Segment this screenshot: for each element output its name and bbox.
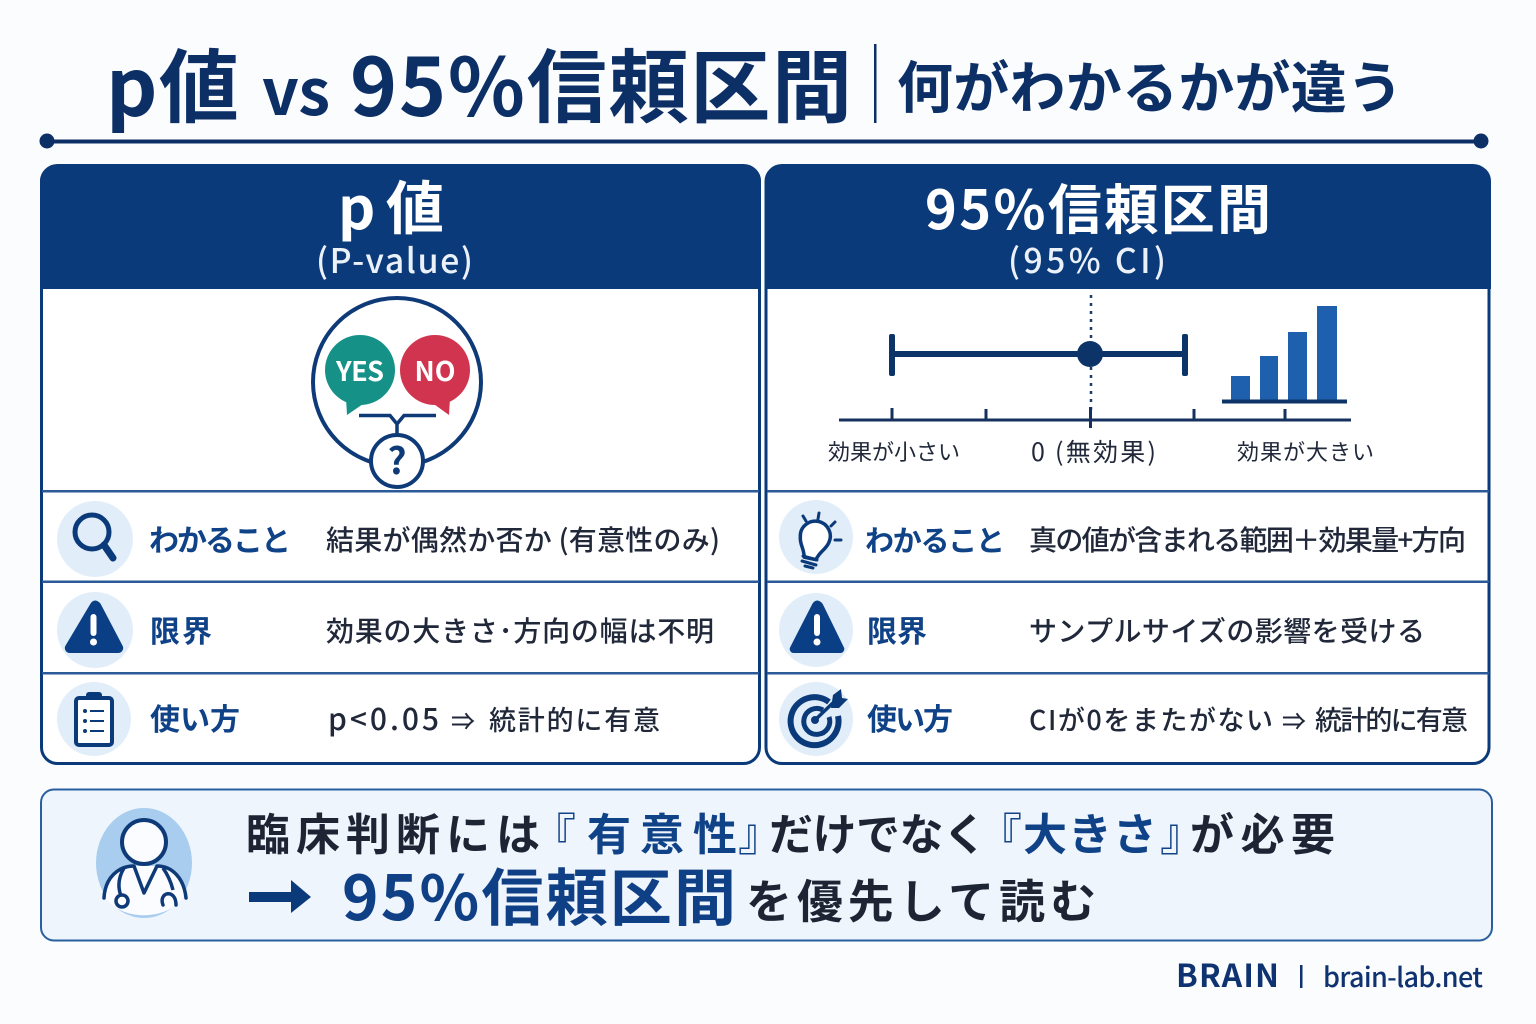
conclusion line 1: 』 xyxy=(1160,799,1204,863)
usage text: ⇒ xyxy=(451,702,475,737)
conclusion line 1: だけでなく xyxy=(769,799,987,863)
row: what it tells: 結果が偶然か否か (有意性のみ) xyxy=(326,519,720,559)
panel header: confidence interval: 95%信頼区間 xyxy=(925,166,1271,245)
panel header: confidence interval: (95% CI) xyxy=(1008,234,1166,283)
panel: conclusion xyxy=(41,790,1492,997)
panel: confidence interval xyxy=(765,165,1491,764)
row: limits: 限界 xyxy=(867,607,927,651)
usage text: 統計的に有意 xyxy=(1315,699,1468,738)
conclusion line 1: 『 xyxy=(978,799,1022,863)
row: usage xyxy=(767,672,1489,756)
row: what it tells: わかること xyxy=(149,516,291,560)
chart: confidence interval on effect axis: 効果が小さい xyxy=(828,435,960,467)
conclusion line 1 xyxy=(246,799,1335,863)
usage text: CIが0をまたがない xyxy=(1029,699,1273,738)
title rule xyxy=(40,134,1488,148)
icon: rising bars xyxy=(1222,306,1347,404)
row: usage: 使い方 xyxy=(150,695,240,739)
chart: confidence interval on effect axis xyxy=(828,295,1374,469)
row: limits: サンプルサイズの影響を受ける xyxy=(1029,610,1425,650)
row: limits: 効果の大きさ･方向の幅は不明 xyxy=(326,610,714,650)
arrow xyxy=(249,880,311,913)
footer brand: brain-lab.net xyxy=(1323,956,1483,995)
row: what it tells: わかること xyxy=(865,518,1005,560)
icon: yes no question: ? xyxy=(387,431,407,485)
conclusion line 1: が必要 xyxy=(1190,799,1335,863)
icon: clipboard xyxy=(57,682,131,756)
icon: target xyxy=(779,682,853,756)
icon: yes no question xyxy=(313,298,481,487)
icon: yes no question: YES xyxy=(335,350,384,389)
conclusion line 2: を優先して読む xyxy=(746,866,1096,932)
panel header: p-value: (P-value) xyxy=(316,234,473,283)
usage text: 統計的に有意 xyxy=(489,699,660,738)
usage text xyxy=(1029,699,1468,738)
row: usage: 使い方 xyxy=(867,695,953,739)
title xyxy=(106,24,1403,140)
title: 95%信頼区間 xyxy=(350,24,852,140)
row: limits xyxy=(42,580,759,668)
conclusion line 1: 『 xyxy=(532,799,576,863)
usage text: p<0.05 xyxy=(328,695,439,739)
row: limits: 限界 xyxy=(150,607,212,651)
icon: yes no question: NO xyxy=(414,350,456,389)
usage text xyxy=(328,695,660,739)
panel: p-value xyxy=(40,162,761,764)
icon: doctor xyxy=(96,808,192,918)
conclusion line 1: 臨床判断には xyxy=(246,799,540,863)
conclusion line 2 xyxy=(249,848,1096,938)
panel header: p-value: p値 xyxy=(338,162,444,246)
icon: warning xyxy=(779,593,853,667)
row: what it tells xyxy=(767,490,1489,574)
row: what it tells: 真の値が含まれる範囲＋効果量+方向 xyxy=(1029,519,1466,559)
icon: warning xyxy=(57,592,133,668)
chart: confidence interval on effect axis: 効果が大きい xyxy=(1237,435,1374,467)
title: p値 xyxy=(106,24,239,140)
conclusion line 1: 』 xyxy=(738,799,782,863)
footer brand xyxy=(1176,951,1483,997)
row: what it tells xyxy=(42,490,759,577)
icon: light bulb xyxy=(779,500,853,574)
row: usage xyxy=(42,672,759,756)
chart: confidence interval on effect axis: 0 (無効果) xyxy=(1031,433,1156,469)
row: limits xyxy=(767,580,1489,667)
panel header: p-value xyxy=(40,162,761,289)
conclusion line 2: 95%信頼区間 xyxy=(342,848,736,938)
panel header: confidence interval xyxy=(765,165,1491,289)
conclusion line 1: 大きさ xyxy=(1023,799,1157,863)
icon: magnifier xyxy=(57,501,133,577)
usage text: ⇒ xyxy=(1282,702,1306,737)
conclusion line 1: 有意性 xyxy=(587,799,737,863)
footer brand: BRAIN xyxy=(1176,951,1279,997)
title: 何がわかるかが違う xyxy=(897,44,1403,125)
title: vs xyxy=(262,42,330,134)
